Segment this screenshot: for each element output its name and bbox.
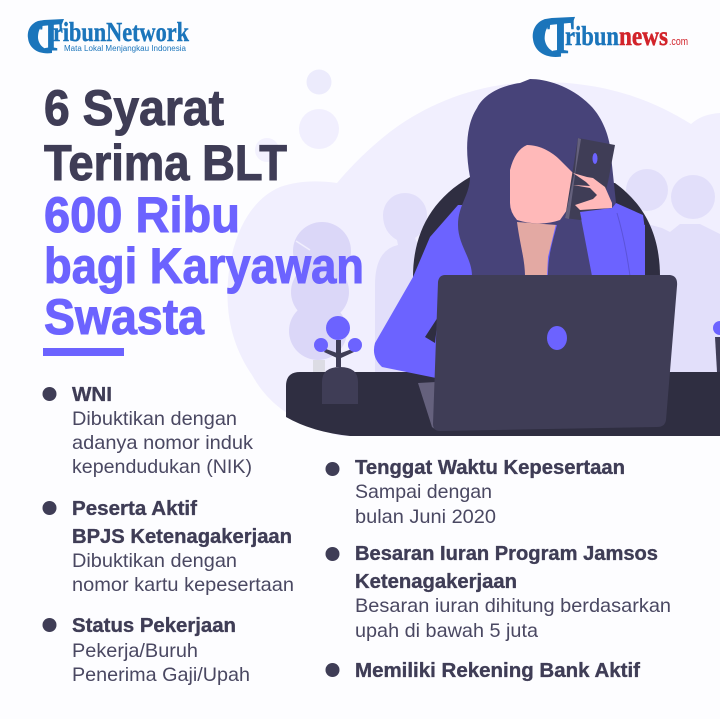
hand: [573, 173, 612, 210]
item: Peserta Aktif: Peserta Aktif: [72, 498, 197, 520]
woman illustration: [374, 79, 660, 378]
item: Status Pekerjaan: [42, 615, 250, 686]
title: Terima BLT: [44, 135, 287, 191]
item: WNI: [42, 384, 253, 478]
item: WNI: adanya nomor induk: [72, 432, 253, 454]
item: WNI: WNI: [72, 384, 112, 406]
logo: Tribunnews: ribun: [565, 21, 619, 51]
item: Tenggat Waktu Kepesertaan: bulan Juni 2020: [355, 506, 496, 528]
item: Status Pekerjaan: Status Pekerjaan: [72, 615, 236, 637]
logo: Tribunnews: news: [619, 21, 668, 51]
item: Status Pekerjaan: Pekerja/Buruh: [72, 640, 198, 662]
background blob: [227, 70, 720, 436]
title: bagi Karyawan: [44, 238, 364, 294]
item: WNI: kependudukan (NIK): [72, 456, 252, 478]
right-edge desk plant: [713, 321, 720, 372]
logo: Tribun Network: Mata Lokal Menjangkau Indonesia: [64, 44, 187, 53]
logo: Tribun Network: [28, 11, 189, 60]
item: Besaran Iuran: Besaran iuran dihitung berdasarkan: [355, 595, 671, 617]
item: Peserta Aktif: BPJS Ketenagakerjaan: [72, 526, 292, 548]
item: Besaran Iuran: upah di bawah 5 juta: [355, 620, 538, 642]
phone: [565, 138, 615, 220]
item: Status Pekerjaan: Penerima Gaji/Upah: [72, 664, 250, 686]
logo: Tribun Network: T: [40, 11, 62, 60]
item: Tenggat Waktu Kepesertaan: [326, 457, 625, 528]
title: 600 Ribu: [44, 187, 240, 243]
title: Swasta: [44, 289, 205, 345]
sleeve: [580, 203, 645, 277]
under-arm gap: [425, 317, 438, 343]
item: Tenggat Waktu Kepesertaan: Sampai dengan: [355, 481, 492, 503]
title: 6 Syarat: [44, 80, 224, 136]
item: Besaran Iuran: Besaran Iuran Program Jamsos: [355, 543, 658, 565]
title: [44, 80, 364, 345]
desk: [286, 372, 720, 436]
item: Rekening Bank: Memiliki Rekening Bank Aktif: [355, 660, 640, 682]
background crowd silhouettes: [375, 169, 720, 372]
chair: [413, 177, 660, 277]
face: [510, 145, 573, 224]
title underline: [43, 348, 124, 356]
item: WNI: Dibuktikan dengan: [72, 408, 237, 430]
laptop: [418, 275, 677, 431]
logo: Tribunnews: [533, 9, 688, 65]
desk plant: [314, 316, 362, 404]
pale plant behind title: [289, 222, 351, 376]
item: Tenggat Waktu Kepesertaan: Tenggat Waktu Kepesertaan: [355, 457, 625, 479]
item: Peserta Aktif: nomor kartu kepesertaan: [72, 574, 294, 596]
item: Peserta Aktif: Dibuktikan dengan: [72, 550, 237, 572]
logo: Tribun Network: ribunNetwork: [53, 17, 189, 47]
item: Peserta Aktif: [42, 498, 294, 596]
neck: [515, 218, 557, 276]
item: Besaran Iuran: Ketenagakerjaan: [355, 571, 517, 593]
logo: Tribunnews: .com: [669, 36, 688, 48]
jacket and arm: [374, 205, 645, 378]
hair: [458, 79, 616, 276]
logo: Tribunnews: T: [547, 9, 574, 65]
item: Besaran Iuran: [326, 543, 671, 642]
